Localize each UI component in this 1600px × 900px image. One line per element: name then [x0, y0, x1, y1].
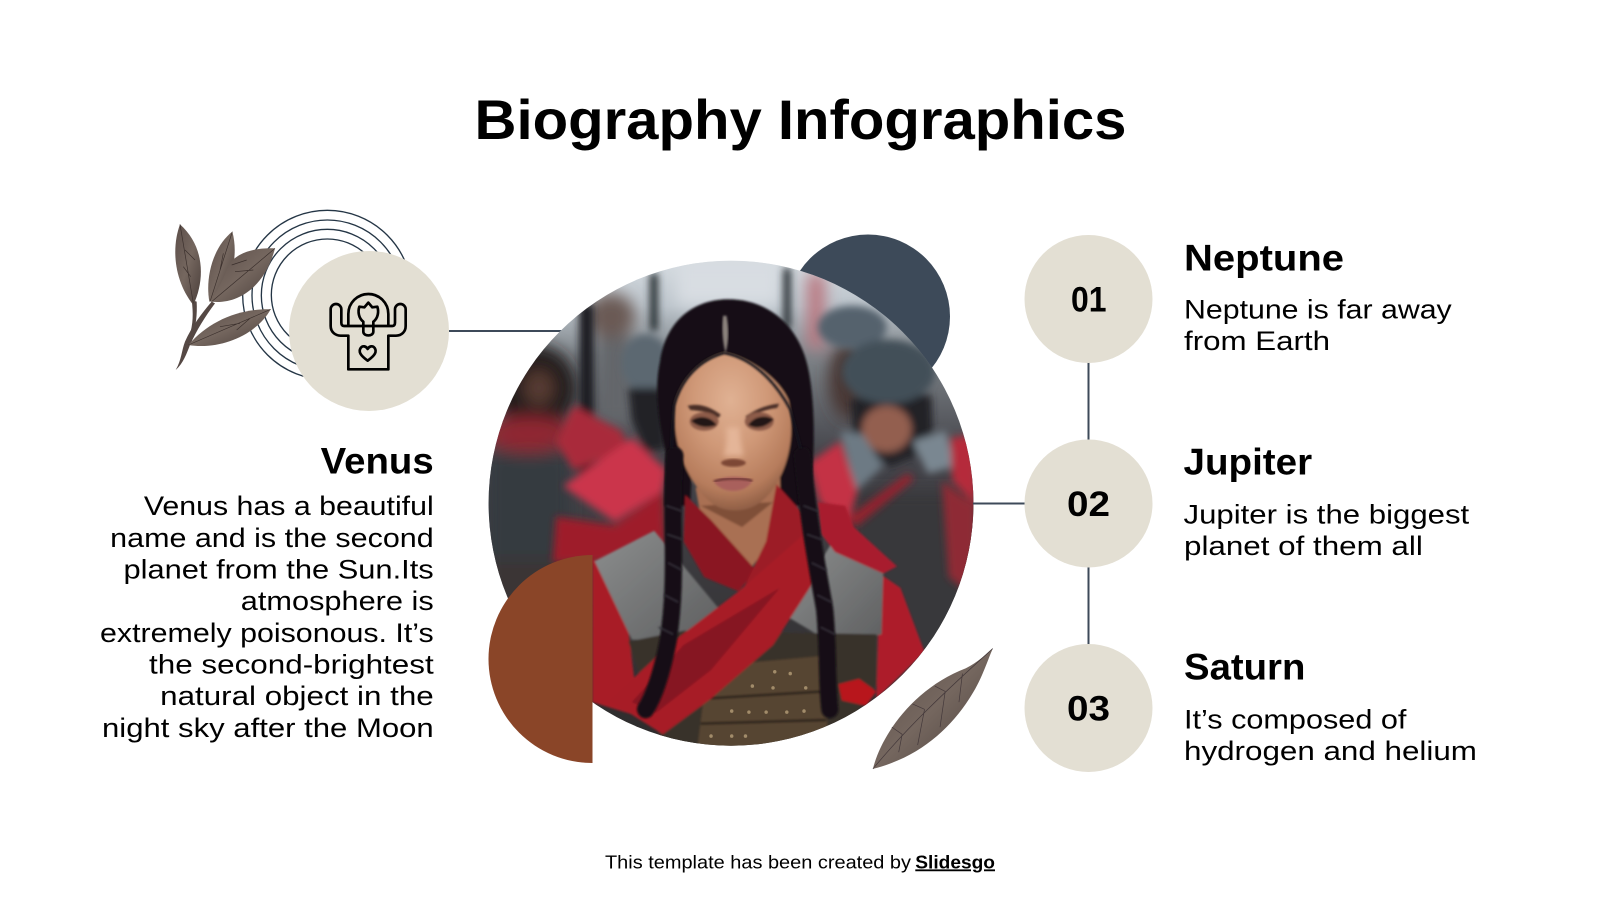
item 01 text: Neptune: Neptune: [1184, 237, 1344, 278]
item 02 text: Jupiter: planet of them all: [1184, 531, 1423, 561]
text block: Venus description: planet from the Sun.Its: [124, 555, 434, 585]
leaf: lower right: [873, 649, 993, 769]
footer credit: Slidesgo: [915, 851, 995, 872]
chest armor: [628, 631, 876, 746]
text block: Venus description: natural object in the: [160, 681, 434, 711]
rivets: [709, 670, 807, 738]
woman: [592, 299, 925, 749]
nose: [723, 427, 744, 456]
armor plates: [595, 531, 718, 640]
item 03 text: Saturn: Saturn: [1184, 647, 1305, 688]
item 02 text: Jupiter: Jupiter is the biggest: [1184, 500, 1470, 530]
portrait photo: [488, 260, 974, 746]
icon: figure with raised arms and heart: [331, 294, 406, 369]
item 03 text: Saturn: It’s composed of: [1184, 705, 1407, 735]
item 02 text: Jupiter: [1184, 442, 1470, 561]
leaves branch: [175, 224, 275, 370]
item 03 number badge: 03: [1067, 690, 1110, 728]
icon badge group: arcs, leaves and circle: [175, 210, 449, 411]
beige circle: [289, 251, 449, 411]
item 02 text: Jupiter: Jupiter: [1184, 442, 1312, 482]
forehead hair strands: [672, 351, 794, 436]
item 01 text: Neptune: Neptune is far away: [1184, 294, 1452, 324]
facial features: [688, 404, 779, 431]
hair back: [657, 299, 814, 506]
item 02 number badge: 02: [1067, 485, 1110, 524]
decorative dark circle behind portrait: [786, 234, 950, 398]
item 01 text: Neptune: from Earth: [1184, 326, 1330, 356]
connector line: icon to portrait: [449, 330, 565, 332]
item 01 number badge: [1024, 235, 1152, 363]
text block: Venus description: night sky after the Moon: [102, 713, 434, 743]
item 02 number badge: [1024, 440, 1152, 568]
text block: Venus description: Venus has a beautiful: [144, 491, 434, 521]
braids: [646, 456, 830, 709]
text block: Venus description: name and is the second: [110, 523, 434, 553]
title: Biography Infographics: [474, 88, 1126, 151]
connectors: timeline: [973, 362, 1088, 646]
heading: Venus: Venus: [321, 440, 434, 482]
text block: Venus description: extremely poisonous. It’s: [100, 618, 434, 648]
neck: [696, 477, 782, 575]
item 03 text: Saturn: [1184, 647, 1477, 766]
sleeves: [592, 559, 639, 716]
text block: Venus description: the second-brightest: [149, 650, 434, 680]
footer credit: This template has been created by: [605, 851, 912, 872]
text block: Venus description: atmosphere is: [241, 586, 434, 616]
text block: Venus description: [100, 491, 434, 743]
face: [674, 353, 791, 511]
item 03 text: Saturn: hydrogen and helium: [1184, 736, 1477, 766]
item 01 number badge: 01: [1071, 280, 1106, 320]
item 01 text: Neptune: [1184, 237, 1452, 356]
item 03 number badge: [1024, 644, 1152, 772]
concentric arcs: [243, 210, 412, 380]
lips: [714, 477, 752, 491]
hair part: [722, 316, 728, 353]
red scarf: [683, 495, 756, 591]
brown half circle: [488, 555, 592, 763]
